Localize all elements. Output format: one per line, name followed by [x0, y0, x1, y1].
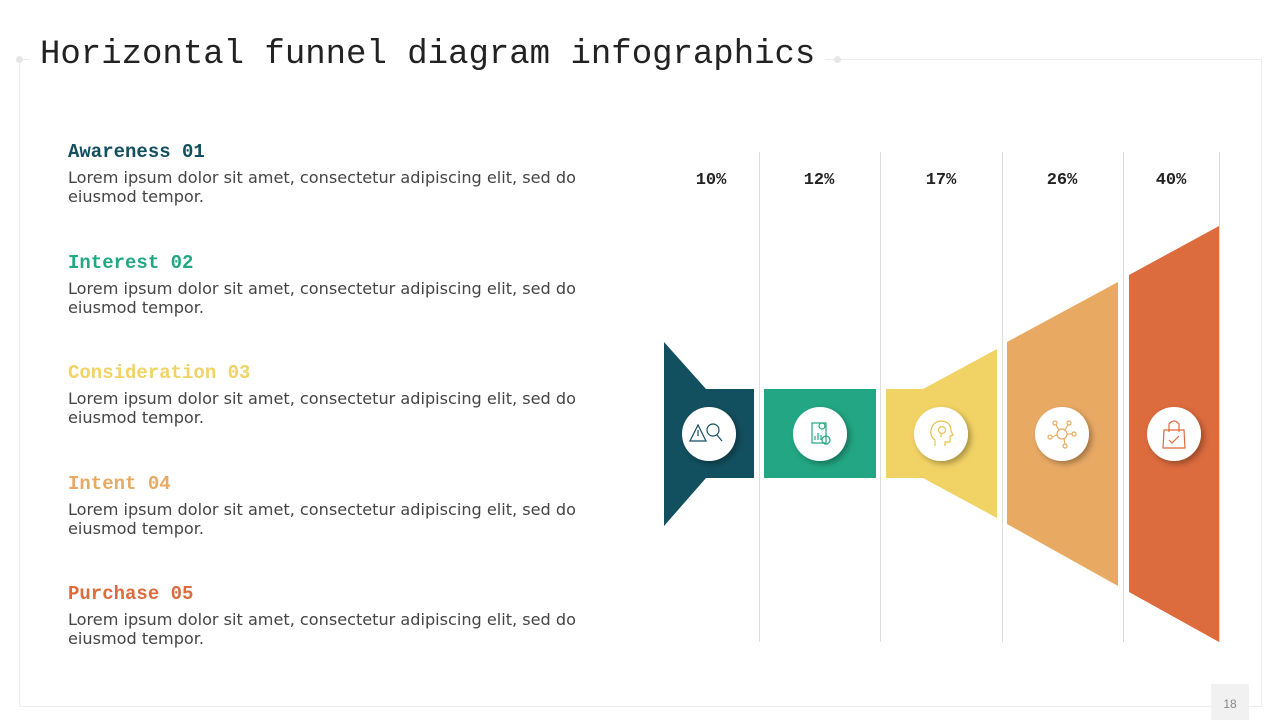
- text block: intent: Intent 04: [68, 473, 171, 495]
- text block: intent: [68, 473, 576, 538]
- percentages: 40%: [1156, 171, 1187, 190]
- icon: report: [812, 423, 830, 444]
- stage 3 shape: [886, 349, 997, 518]
- percentages: 10%: [696, 171, 727, 190]
- text block: awareness: eiusmod tempor.: [68, 187, 204, 206]
- text block: interest: Lorem ipsum dolor sit amet, consectetur adipiscing elit, sed do: [68, 279, 576, 298]
- icon: network: [1048, 421, 1076, 448]
- text block: interest: Interest 02: [68, 252, 193, 274]
- text block: intent: Lorem ipsum dolor sit amet, consectetur adipiscing elit, sed do: [68, 500, 576, 519]
- text block: awareness: [68, 141, 576, 206]
- text block: interest: [68, 252, 576, 317]
- percentages: 12%: [804, 171, 835, 190]
- text block: consideration: Consideration 03: [68, 362, 250, 384]
- percentages: 17%: [926, 171, 957, 190]
- text block: interest: eiusmod tempor.: [68, 298, 204, 317]
- text block: consideration: eiusmod tempor.: [68, 408, 204, 427]
- icon circles: [682, 407, 1201, 461]
- text block: purchase: Purchase 05: [68, 583, 193, 605]
- text block: intent: eiusmod tempor.: [68, 519, 204, 538]
- stage 2 shape: [764, 389, 876, 478]
- stage 4 shape: [1007, 282, 1118, 586]
- percentages: 26%: [1047, 171, 1078, 190]
- page number: 18: [1223, 697, 1237, 711]
- text block: purchase: Lorem ipsum dolor sit amet, consectetur adipiscing elit, sed do: [68, 610, 576, 629]
- stage 5 shape: [1129, 226, 1219, 642]
- page number: [1211, 684, 1249, 720]
- text block: awareness: Awareness 01: [68, 141, 205, 163]
- icon: head with bulb: [931, 421, 953, 446]
- text block: purchase: eiusmod tempor.: [68, 629, 204, 648]
- text block: consideration: [68, 362, 576, 427]
- text block: awareness: Lorem ipsum dolor sit amet, consectetur adipiscing elit, sed do: [68, 168, 576, 187]
- icon: shopping bag: [1163, 421, 1185, 448]
- text block: purchase: [68, 583, 576, 648]
- text block: consideration: Lorem ipsum dolor sit amet, consectetur adipiscing elit, sed do: [68, 389, 576, 408]
- icon: warning search: [690, 424, 722, 441]
- title: Horizontal funnel diagram infographics: [40, 36, 815, 74]
- stage 1 shape: [664, 342, 754, 526]
- percentages: [696, 171, 1187, 190]
